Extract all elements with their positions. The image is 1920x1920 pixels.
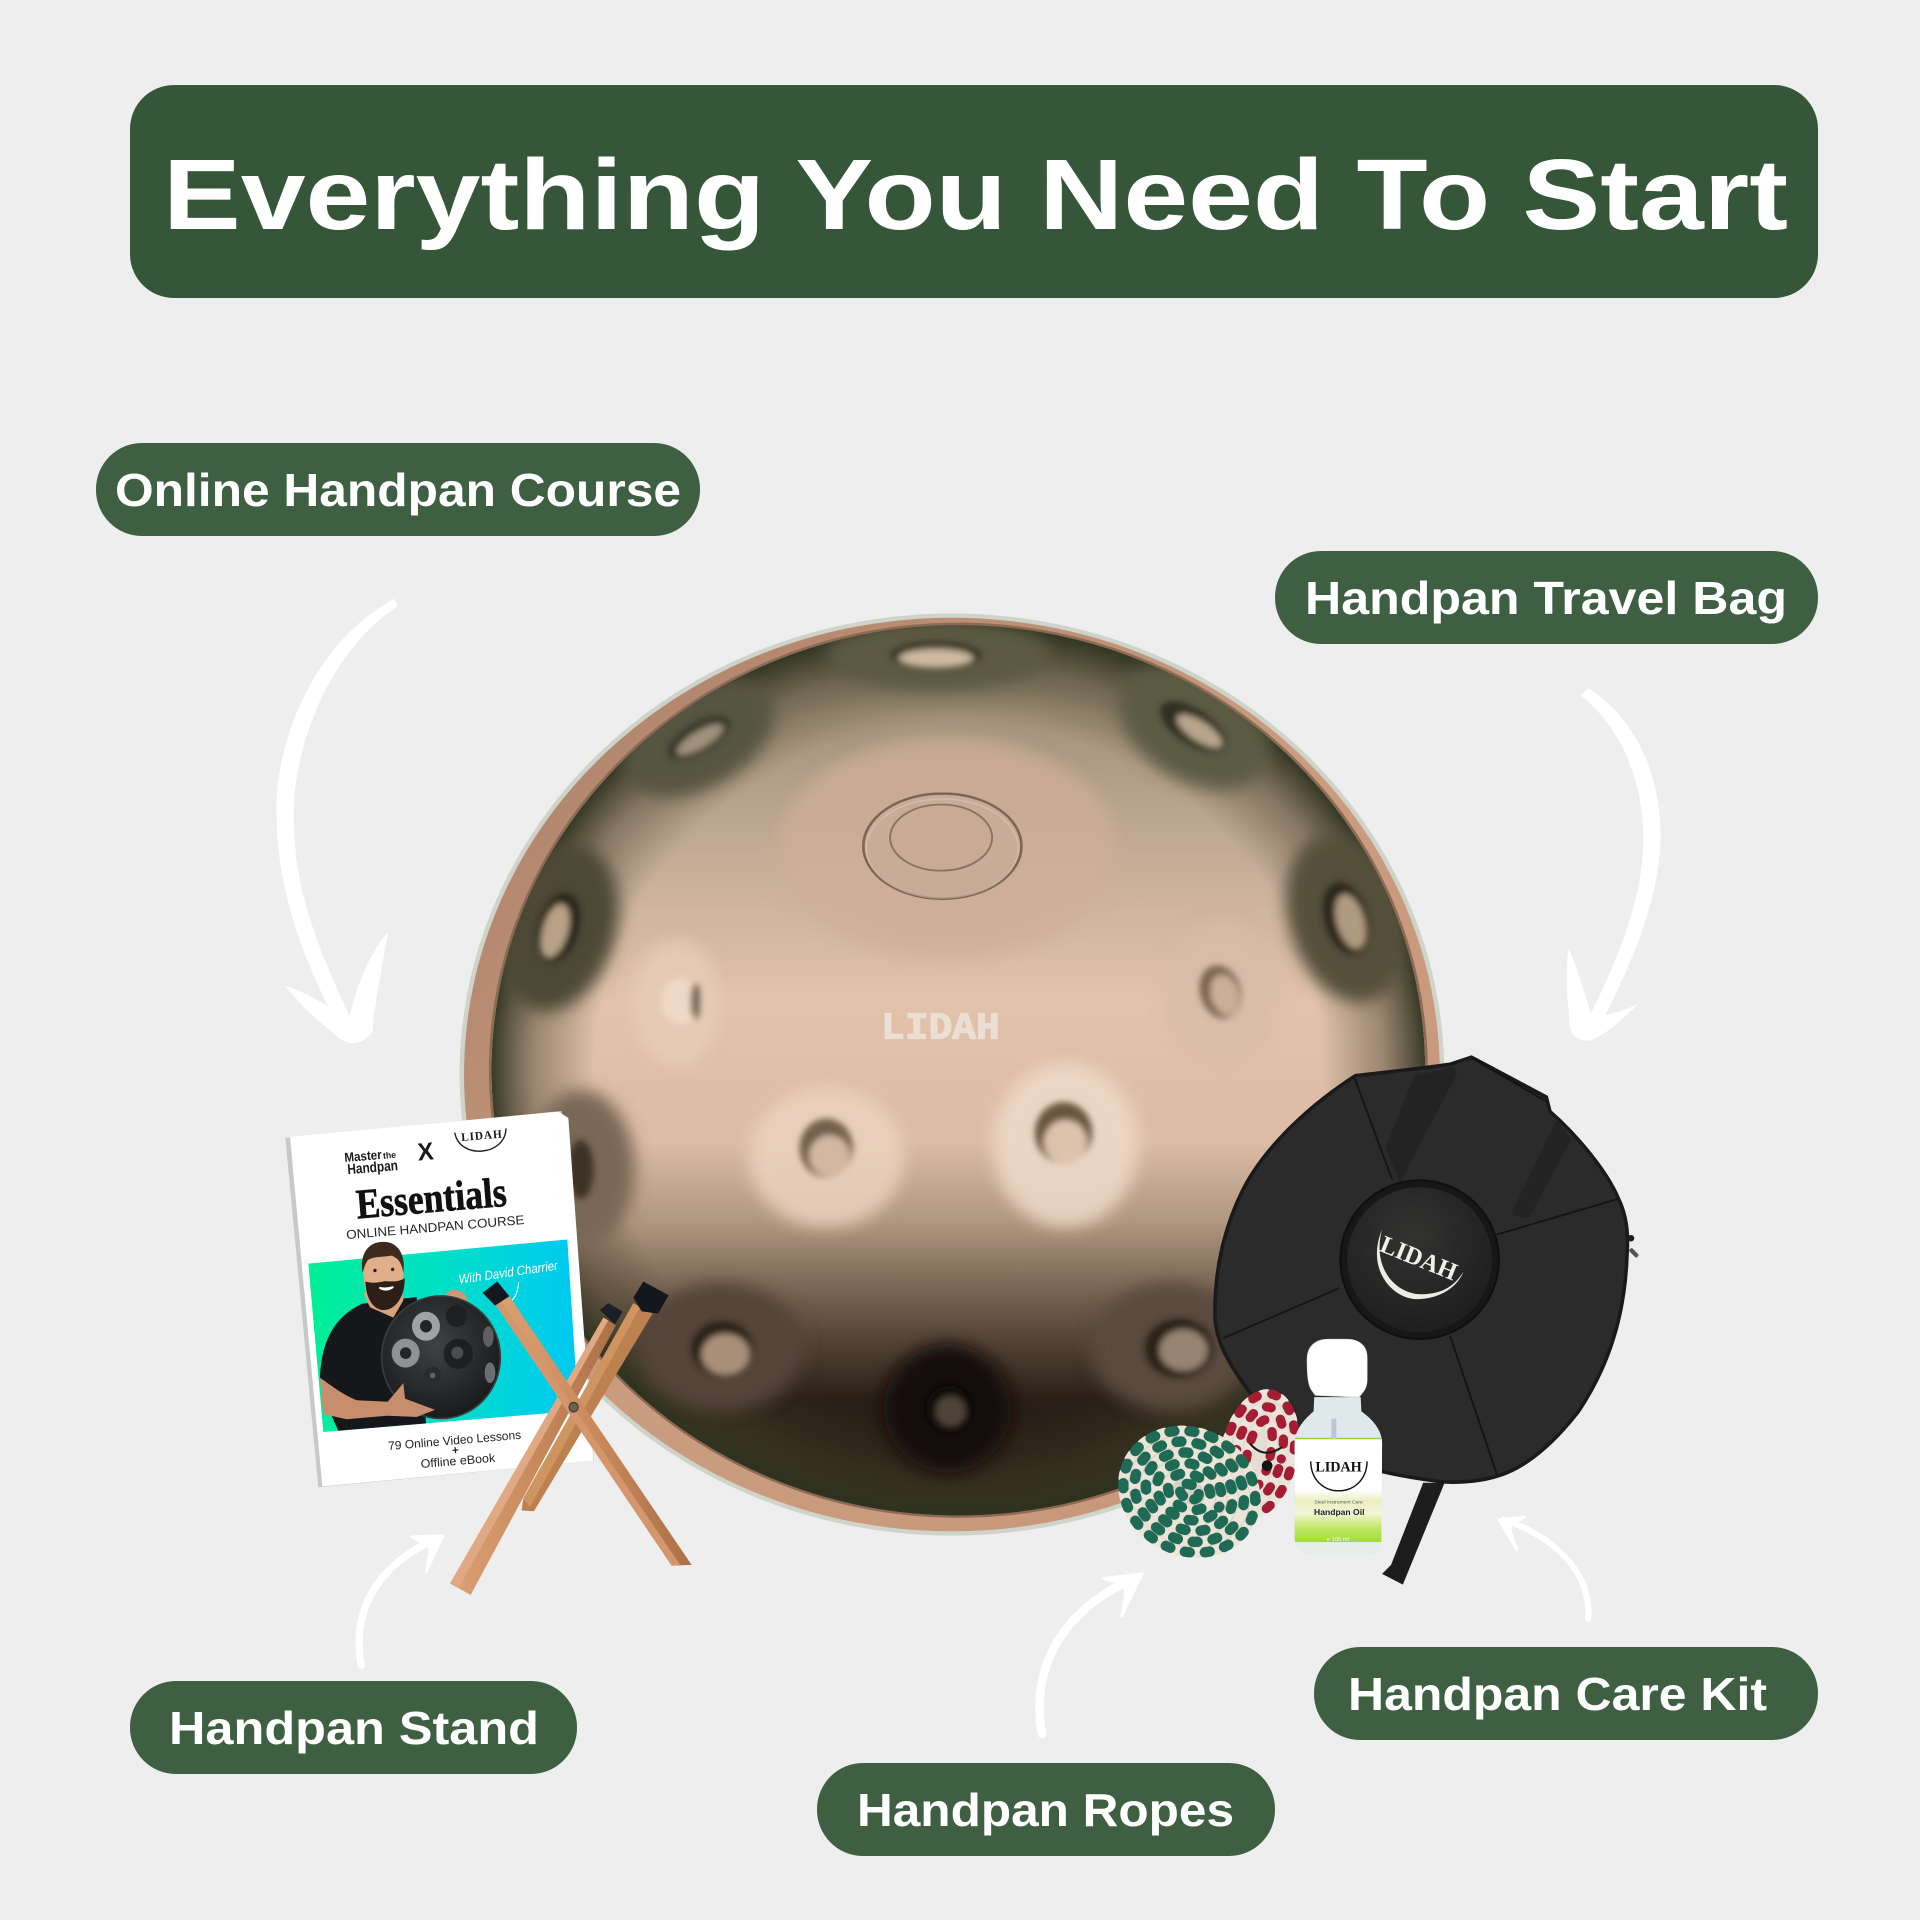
bottle label text: Steel Instrument Care bbox=[1314, 1500, 1363, 1506]
label: handpan ropes: Handpan Ropes bbox=[857, 1784, 1234, 1836]
book footer text: 79 Online Video Lessons bbox=[388, 1428, 522, 1453]
label: handpan care kit bbox=[1314, 1647, 1818, 1740]
arrow: travel bag bbox=[1567, 688, 1661, 1041]
label: handpan care kit: Handpan Care Kit bbox=[1348, 1668, 1767, 1720]
bag logo: LIDAH bbox=[1376, 1231, 1461, 1287]
label: handpan stand: Handpan Stand bbox=[169, 1702, 539, 1754]
man with handpan bbox=[320, 1287, 467, 1435]
arrow: care kit bbox=[1499, 1517, 1588, 1619]
label: handpan ropes bbox=[817, 1763, 1275, 1856]
arrow: stand bbox=[359, 1536, 443, 1665]
label: online handpan course bbox=[96, 443, 700, 536]
bottle label text: Handpan Oil bbox=[1314, 1507, 1364, 1517]
course book bbox=[285, 1111, 594, 1487]
book logos: Master bbox=[344, 1147, 382, 1165]
ropes bbox=[1102, 1386, 1307, 1576]
arrow: course bbox=[276, 599, 398, 1043]
travel bag bbox=[1215, 1057, 1639, 1585]
label: handpan stand bbox=[130, 1681, 577, 1774]
book subtitle: ONLINE HANDPAN COURSE bbox=[346, 1213, 525, 1242]
oil bottle bbox=[1293, 1339, 1384, 1556]
label: handpan travel bag bbox=[1275, 551, 1818, 644]
book signature: With David Charrier bbox=[458, 1257, 559, 1287]
book footer text: Offline eBook bbox=[420, 1451, 496, 1471]
title banner: Everything You Need To Start bbox=[163, 139, 1788, 251]
label: online handpan course: Online Handpan Course bbox=[115, 464, 681, 516]
bag strap bbox=[1382, 1483, 1445, 1585]
arrow: ropes bbox=[1040, 1573, 1142, 1734]
handpan instrument bbox=[460, 613, 1444, 1536]
book logos: Handpan bbox=[347, 1158, 399, 1178]
handpan instrument: LIDAH bbox=[881, 1007, 1000, 1050]
book logos: the bbox=[383, 1150, 396, 1161]
green rope bbox=[1102, 1408, 1277, 1576]
bottle label text bbox=[1311, 1459, 1367, 1543]
bottle label text: ℮ 100 ml bbox=[1327, 1537, 1349, 1543]
book logos bbox=[343, 1128, 509, 1178]
book footer text bbox=[388, 1428, 523, 1474]
book footer text: + bbox=[452, 1445, 459, 1457]
red rope bbox=[1211, 1386, 1307, 1523]
book logos: X bbox=[417, 1138, 435, 1167]
book title: Essentials bbox=[354, 1168, 508, 1228]
label: handpan travel bag: Handpan Travel Bag bbox=[1305, 572, 1787, 624]
handpan stand bbox=[450, 1281, 692, 1595]
bottle label text: LIDAH bbox=[1315, 1459, 1362, 1475]
book logos: LIDAH bbox=[461, 1129, 502, 1144]
title banner bbox=[130, 85, 1818, 298]
